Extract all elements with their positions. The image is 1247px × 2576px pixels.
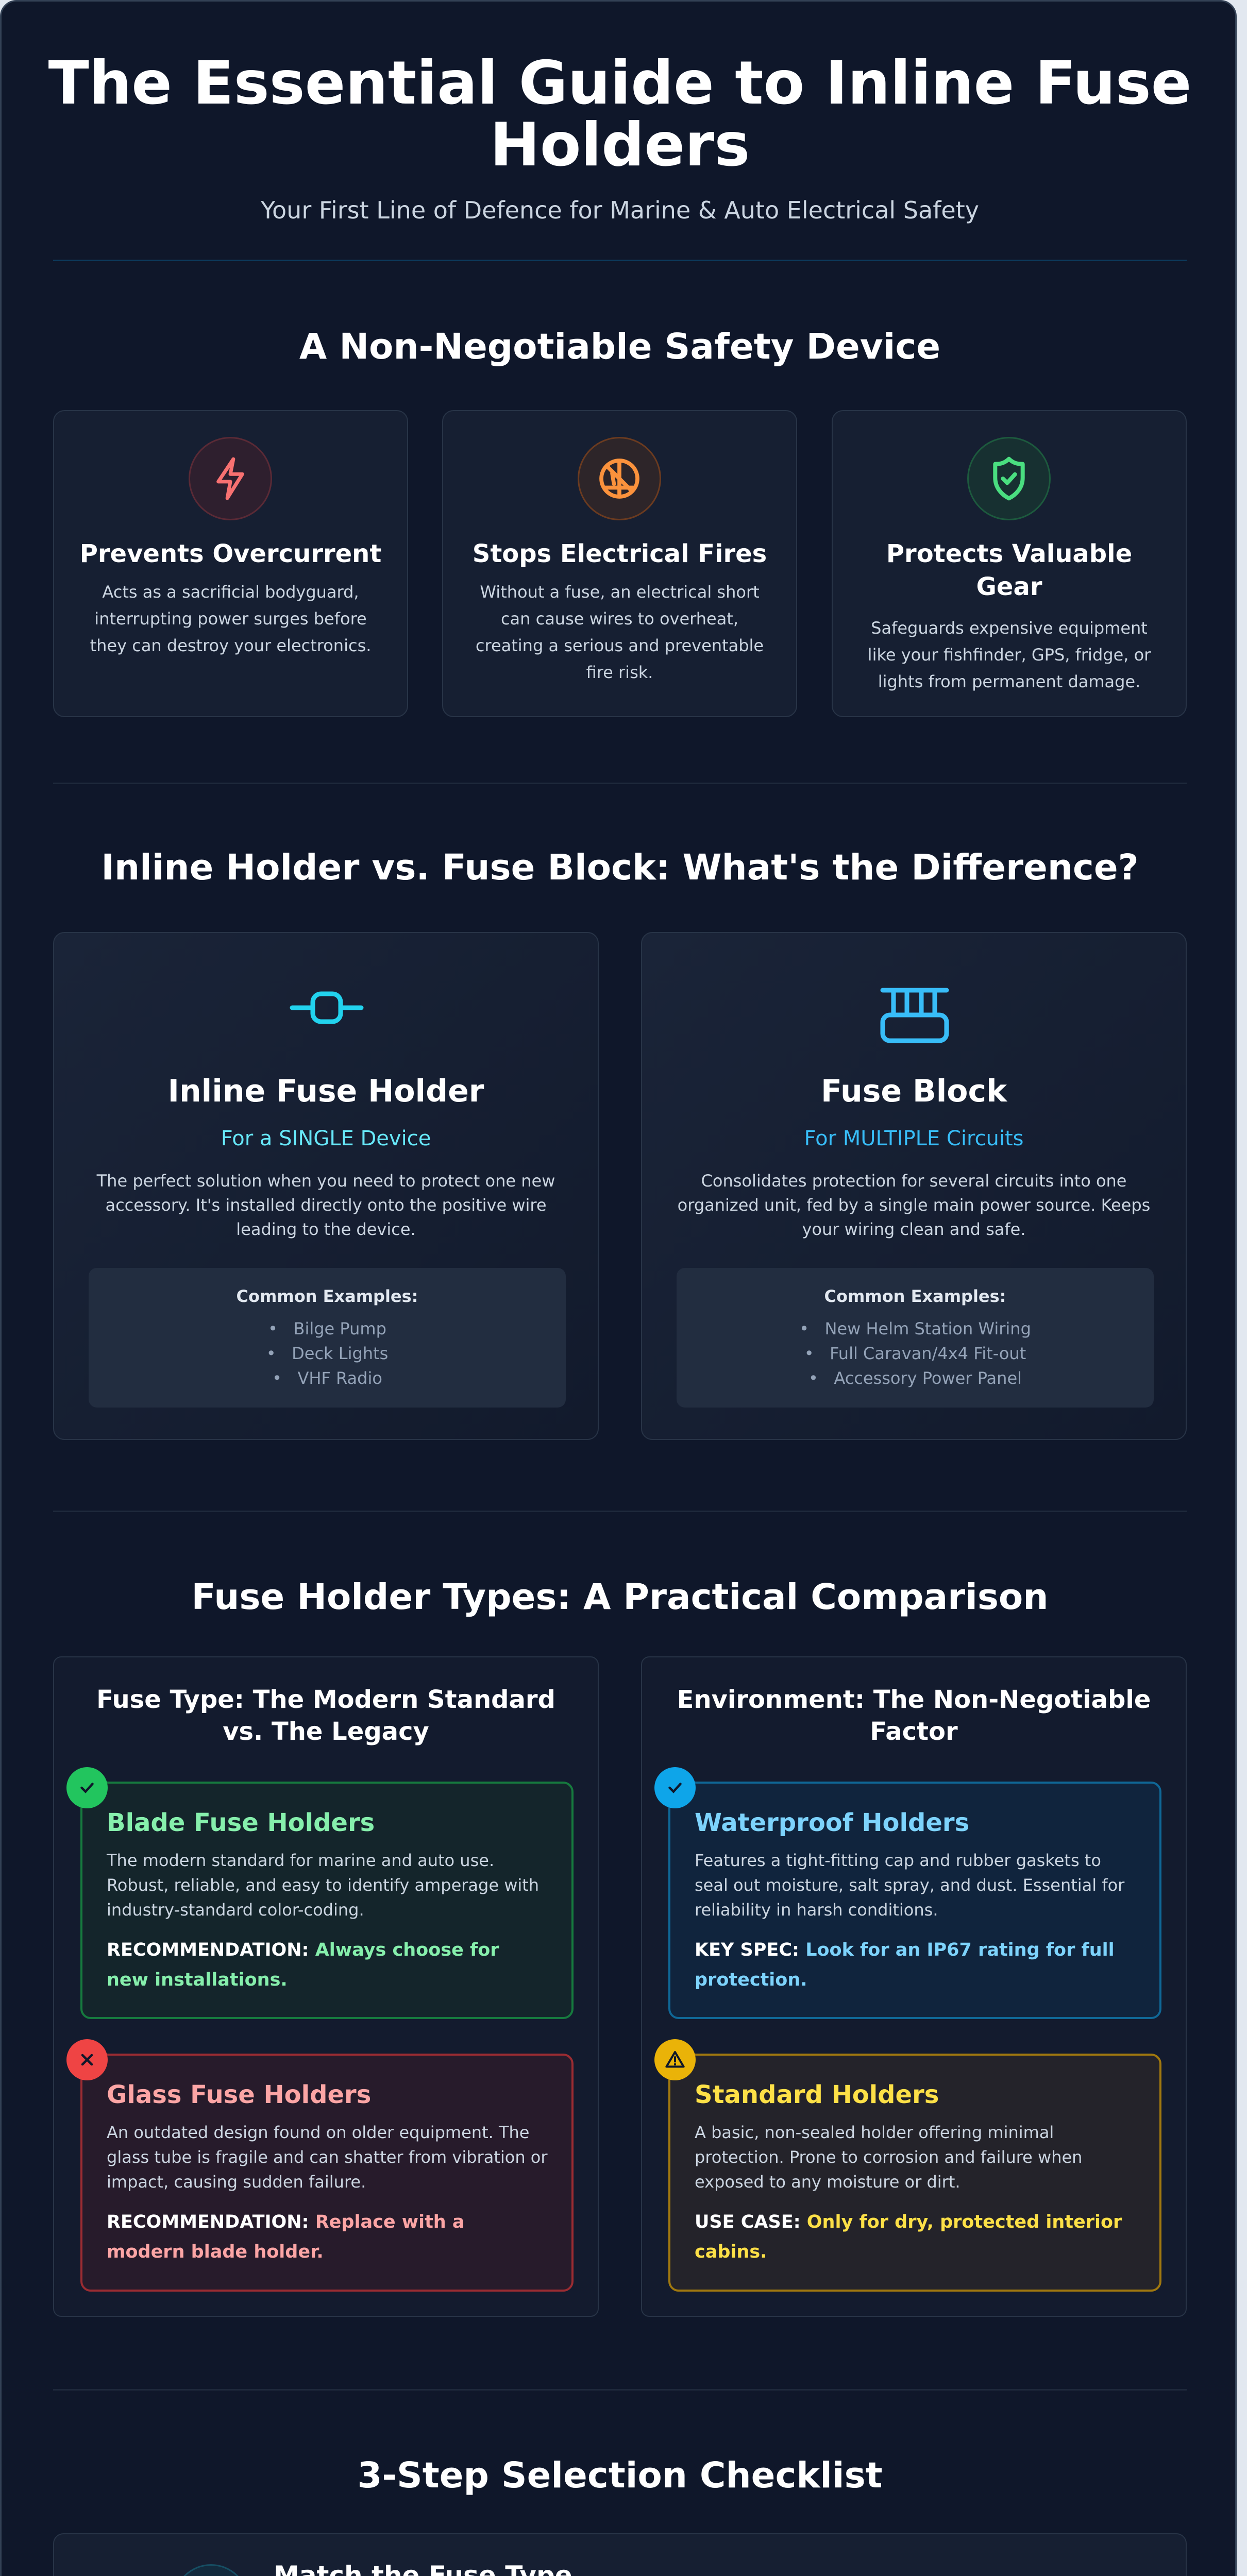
title: Fuse Block: [821, 1073, 1007, 1109]
panel heading: Factor: [870, 1717, 958, 1746]
box: glass: Glass Fuse Holders: [107, 2080, 371, 2109]
card text: Acts as a sacrificial bodyguard,: [102, 582, 359, 602]
box: blade: The modern standard for marine and auto use.: [107, 1851, 494, 1870]
box: waterproof: [668, 1782, 1161, 2019]
panel heading: Fuse Type: The Modern Standard: [96, 1685, 555, 1714]
subtitle: For MULTIPLE Circuits: [804, 1127, 1023, 1150]
box: glass: RECOMMENDATION: Replace with a: [107, 2212, 465, 2232]
card title: Gear: [976, 572, 1042, 601]
title: Holders: [490, 110, 750, 180]
card text: [90, 582, 371, 655]
box: standard: protection. Prone to corrosion and failure when: [695, 2147, 1082, 2167]
box: standard: A basic, non-sealed holder offering minimal: [695, 2123, 1054, 2142]
examples box: • Full Caravan/4x4 Fit-out: [804, 1344, 1026, 1363]
card text: Safeguards expensive equipment: [871, 618, 1148, 638]
box: waterproof: seal out moisture, salt spray, and dust. Essential for: [695, 1875, 1124, 1895]
badge: warning: [654, 2039, 696, 2080]
box: blade: new installations.: [107, 1970, 288, 1990]
panel heading: [96, 1685, 555, 1746]
badge: check: [654, 1767, 696, 1808]
icon: inline fuse: [290, 991, 364, 1024]
card text: [868, 618, 1151, 691]
panel: inline fuse holder: [53, 932, 599, 1440]
box: blade: Blade Fuse Holders: [107, 1808, 375, 1837]
panel: fuse type: [53, 1656, 599, 2317]
card text: fire risk.: [586, 663, 653, 682]
card text: they can destroy your electronics.: [90, 636, 371, 655]
title: The Essential Guide to Inline Fuse: [48, 48, 1191, 118]
card title: Protects Valuable: [886, 539, 1132, 568]
box: blade: Robust, reliable, and easy to identify amperage with: [107, 1875, 539, 1895]
box: standard: USE CASE: Only for dry, protected interior: [695, 2212, 1122, 2232]
description: The perfect solution when you need to protect one new accessory. It's installed directly onto the positive wire leading to the device.: [97, 1171, 555, 1239]
panel: prevents overcurrent: [53, 410, 408, 717]
box: glass: impact, causing sudden failure.: [107, 2172, 366, 2192]
box: standard: Standard Holders: [695, 2080, 939, 2109]
panel: environment: [641, 1656, 1187, 2317]
box: standard: exposed to any moisture or dirt.: [695, 2172, 960, 2192]
examples box: Common Examples:: [824, 1286, 1006, 1306]
card title: [886, 539, 1132, 601]
badge: check: [66, 1767, 108, 1808]
examples box: • New Helm Station Wiring: [799, 1319, 1031, 1338]
examples box: • Bilge Pump: [268, 1319, 386, 1338]
examples box: • Accessory Power Panel: [808, 1368, 1022, 1388]
examples box: Common Examples:: [237, 1286, 418, 1306]
description: Consolidates protection for several circuits into one organized unit, fed by a single main power source. Keeps your wiring clean and safe.: [678, 1171, 1150, 1239]
box: blade: [80, 1782, 574, 2019]
box: blade: RECOMMENDATION: Always choose for: [107, 1940, 499, 1960]
box: waterproof: protection.: [695, 1970, 807, 1990]
card title: Prevents Overcurrent: [80, 539, 381, 568]
card text: like your fishfinder, GPS, fridge, or: [868, 645, 1151, 665]
examples box: [677, 1268, 1154, 1408]
card text: Without a fuse, an electrical short: [480, 582, 760, 602]
box: glass: [80, 2054, 574, 2292]
box: glass: glass tube is fragile and can shatter from vibration or: [107, 2147, 547, 2167]
icon: shield: [967, 437, 1051, 520]
icon: lightning: [189, 437, 272, 520]
box: waterproof: Features a tight-fitting cap and rubber gaskets to: [695, 1851, 1101, 1870]
panel heading: vs. The Legacy: [223, 1717, 429, 1746]
card title: Stops Electrical Fires: [473, 539, 767, 568]
heading: comparison: Fuse Holder Types: A Practical Comparison: [192, 1577, 1048, 1618]
subtitle: Your First Line of Defence for Marine & Auto Electrical Safety: [261, 196, 979, 224]
panel: stops fires: [442, 410, 797, 717]
badge: x: [66, 2039, 108, 2080]
title: [48, 48, 1191, 180]
heading: difference: Inline Holder vs. Fuse Block: What's the Difference?: [101, 847, 1139, 888]
box: waterproof: reliability in harsh conditions.: [695, 1900, 938, 1920]
panel heading: [677, 1685, 1151, 1746]
heading: safety device: A Non-Negotiable Safety Device: [299, 326, 940, 367]
step 1: [53, 2533, 1187, 2576]
box: glass: modern blade holder.: [107, 2242, 324, 2262]
examples box: [89, 1268, 566, 1408]
icon: fuse block: [880, 988, 949, 1043]
panel: fuse block: [641, 932, 1187, 1440]
card text: lights from permanent damage.: [878, 672, 1140, 691]
card text: can cause wires to overheat,: [501, 609, 738, 629]
icon: flame ban: [578, 437, 661, 520]
heading: checklist: 3-Step Selection Checklist: [357, 2455, 883, 2496]
panel heading: Environment: The Non-Negotiable: [677, 1685, 1151, 1714]
box: standard: [668, 2054, 1161, 2292]
box: standard: cabins.: [695, 2242, 767, 2262]
card text: interrupting power surges before: [94, 609, 367, 629]
icon: document: [173, 2564, 249, 2576]
card text: creating a serious and preventable: [476, 636, 764, 655]
box: waterproof: KEY SPEC: Look for an IP67 rating for full: [695, 1940, 1115, 1960]
card text: [476, 582, 764, 682]
panel: protects gear: [832, 410, 1187, 717]
box: waterproof: Waterproof Holders: [695, 1808, 969, 1837]
box: glass: An outdated design found on older equipment. The: [107, 2123, 529, 2142]
box: blade: industry-standard color-coding.: [107, 1900, 364, 1920]
examples box: • VHF Radio: [272, 1368, 382, 1388]
examples box: • Deck Lights: [266, 1344, 388, 1363]
subtitle: For a SINGLE Device: [221, 1127, 431, 1150]
title: Inline Fuse Holder: [168, 1073, 484, 1109]
